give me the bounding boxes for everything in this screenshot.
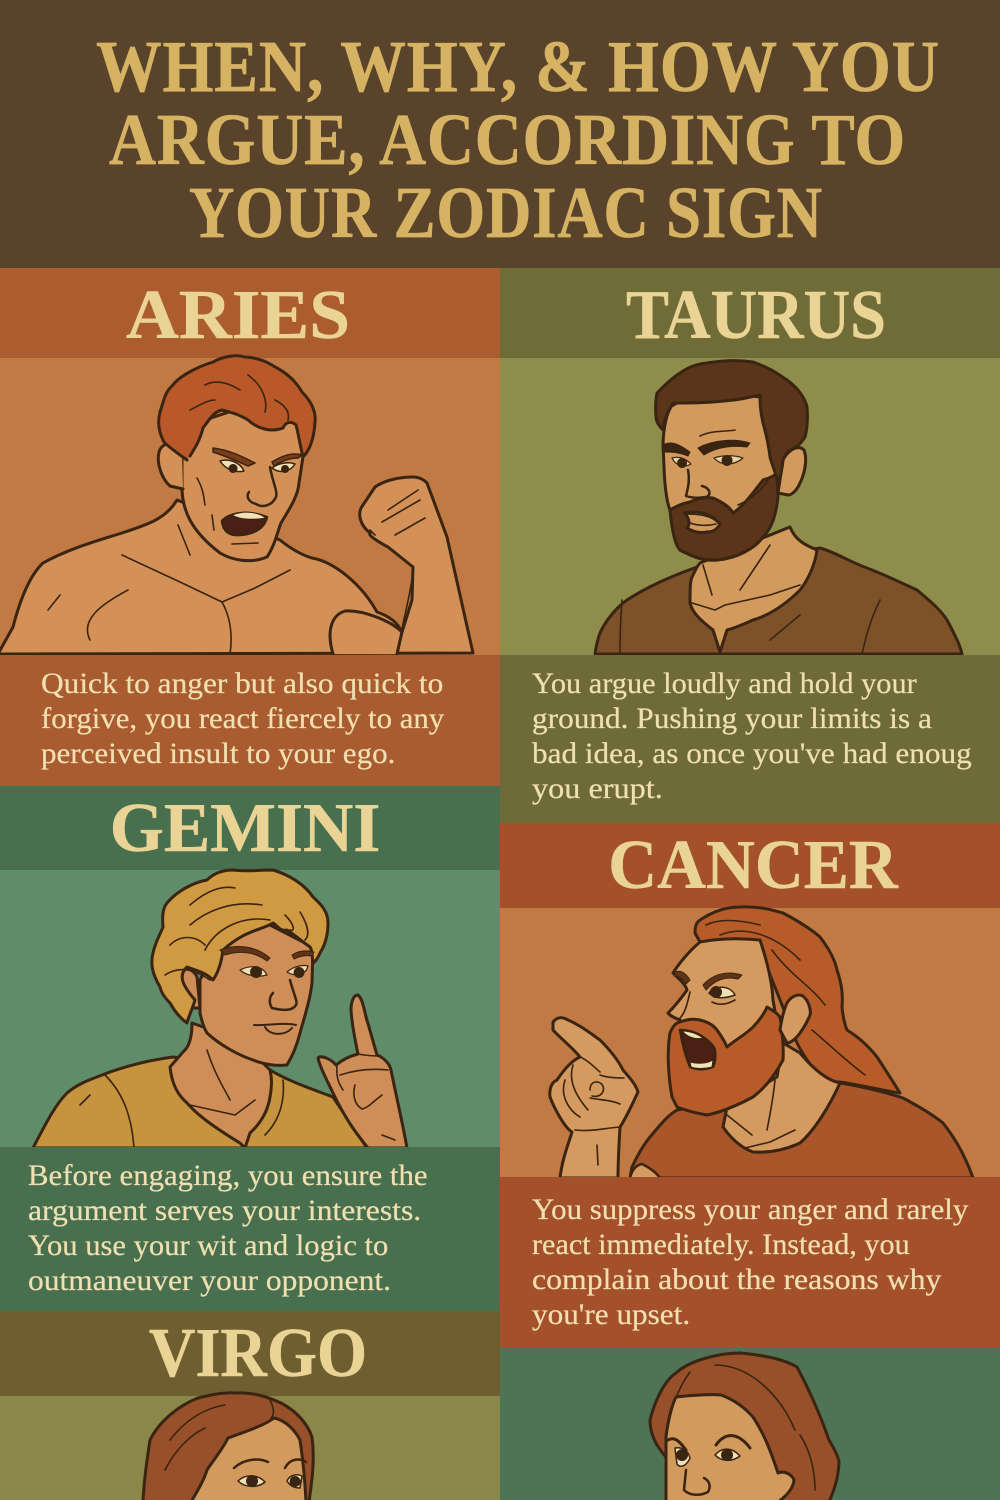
panel: virgo	[0, 1311, 500, 1500]
caption: cancer: react immediately. Instead, you	[532, 1228, 910, 1261]
title: YOUR ZODIAC SIGN	[189, 172, 823, 253]
heading: gemini	[0, 786, 500, 870]
caption: taurus	[500, 655, 1000, 823]
illustration: aries man	[0, 354, 474, 655]
caption: taurus: You argue loudly and hold your	[532, 667, 917, 700]
caption: aries: perceived insult to your ego.	[41, 737, 395, 770]
caption: gemini	[0, 1147, 500, 1311]
heading: aries	[0, 268, 500, 358]
caption: taurus: bad idea, as once you've had enoug	[532, 737, 972, 770]
caption: taurus: ground. Pushing your limits is a	[532, 702, 932, 735]
panel: next sign	[500, 1347, 1000, 1500]
panel: aries	[0, 268, 500, 786]
heading: cancer: CANCER	[608, 827, 898, 904]
caption: aries: Quick to anger but also quick to	[41, 667, 443, 700]
panel: gemini	[0, 786, 500, 1311]
caption: gemini: outmaneuver your opponent.	[28, 1264, 391, 1297]
illustration: long-haired person	[648, 1352, 840, 1500]
caption: cancer: complain about the reasons why	[532, 1263, 941, 1296]
heading: taurus: TAURUS	[626, 277, 886, 354]
illustration: taurus man	[594, 359, 964, 655]
caption: cancer: You suppress your anger and rarely	[532, 1193, 968, 1226]
title: ARGUE, ACCORDING TO	[109, 99, 906, 180]
heading: virgo: VIRGO	[149, 1315, 367, 1392]
caption: taurus: you erupt.	[532, 772, 663, 805]
heading: aries: ARIES	[126, 277, 350, 354]
caption: aries	[0, 655, 500, 786]
heading: gemini: GEMINI	[110, 790, 380, 867]
caption: gemini: argument serves your interests.	[28, 1194, 421, 1227]
illustration: cancer man	[548, 905, 974, 1177]
caption: aries: forgive, you react fiercely to any	[41, 702, 444, 735]
caption: cancer: you're upset.	[532, 1298, 690, 1331]
panel: taurus	[500, 268, 1000, 823]
caption: gemini: You use your wit and logic to	[28, 1229, 388, 1262]
heading: cancer	[500, 823, 1000, 908]
title	[96, 26, 940, 253]
panel: cancer	[500, 823, 1000, 1347]
heading: taurus	[500, 268, 1000, 358]
illustration: gemini man	[32, 868, 408, 1147]
caption: cancer	[500, 1177, 1000, 1347]
title banner	[0, 0, 1000, 268]
heading: virgo	[0, 1311, 500, 1396]
illustration: virgo person	[142, 1391, 315, 1500]
title: WHEN, WHY, & HOW YOU	[96, 26, 940, 107]
caption: gemini: Before engaging, you ensure the	[28, 1159, 428, 1192]
